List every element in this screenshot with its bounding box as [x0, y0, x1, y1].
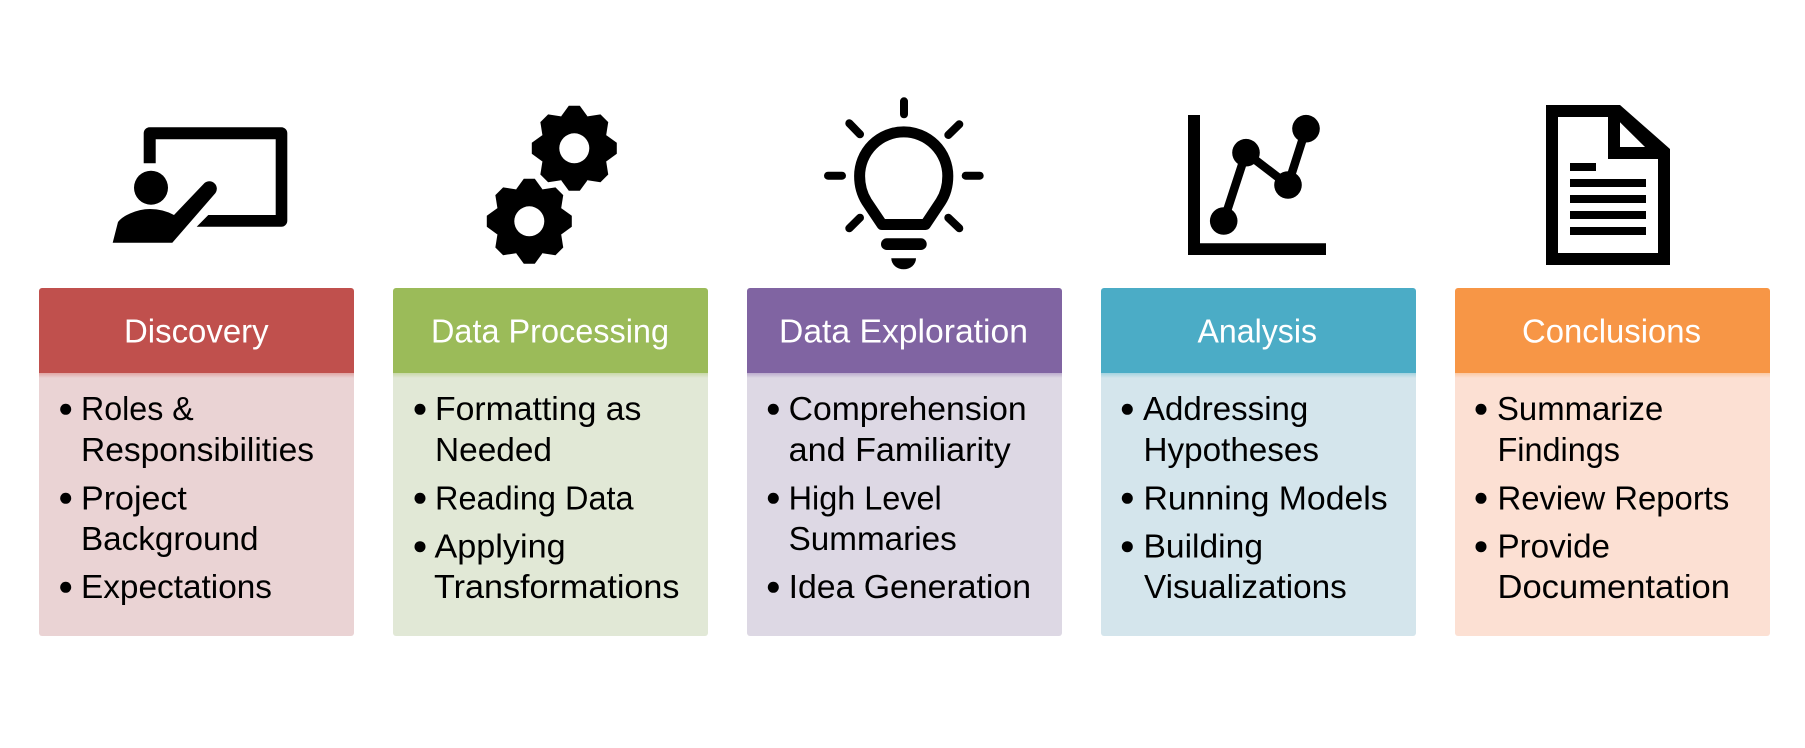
bullet list	[1476, 390, 1730, 605]
bullet list: and Familiarity	[789, 431, 1011, 468]
header divider fade	[393, 373, 708, 378]
heading: Analysis	[1198, 313, 1317, 350]
heading: Data Exploration	[779, 313, 1028, 350]
header divider fade	[747, 373, 1062, 378]
panel: Data Exploration	[747, 288, 1062, 636]
bullet list: Addressing	[1143, 390, 1308, 427]
bullet list: Project	[81, 479, 187, 516]
panel: Discovery	[39, 288, 354, 636]
bullet list: Findings	[1498, 431, 1620, 468]
panel body	[1101, 370, 1416, 636]
header box	[39, 288, 354, 373]
header box	[1455, 288, 1770, 373]
bullet list: Transformations	[434, 568, 680, 605]
header box	[747, 288, 1062, 373]
header divider fade	[1455, 373, 1770, 378]
bullet list: Documentation	[1498, 568, 1730, 605]
icon: line chart	[1188, 115, 1326, 255]
icon: gears	[487, 106, 617, 264]
panel: Conclusions	[1455, 288, 1770, 636]
lower gear	[487, 179, 572, 264]
bullet list: High Level	[789, 479, 942, 516]
header divider fade	[39, 373, 354, 378]
upper gear	[532, 106, 617, 191]
bullet list: Comprehension	[789, 390, 1027, 427]
bullet list	[60, 390, 314, 605]
bullet list	[768, 390, 1031, 605]
icon: presenter at board	[113, 127, 287, 243]
bullet list: Expectations	[81, 568, 272, 605]
bullet list: Roles &	[81, 390, 194, 427]
panel body	[747, 370, 1062, 636]
bullet list: Background	[81, 520, 258, 557]
panel: Data Processing	[393, 288, 708, 636]
panel: Analysis	[1101, 288, 1416, 636]
bullet list: Reading Data	[435, 479, 634, 516]
bullet list	[414, 390, 680, 605]
bullet list: Idea Generation	[789, 568, 1031, 605]
bullet list: Applying	[434, 528, 566, 565]
bullet list: Hypotheses	[1144, 431, 1319, 468]
icon: document	[1546, 105, 1670, 265]
panel body	[1455, 370, 1770, 636]
bullet list: Summarize	[1497, 390, 1663, 427]
heading: Data Processing	[431, 313, 669, 350]
bullet list: Summaries	[789, 520, 957, 557]
bullet list: Visualizations	[1144, 568, 1347, 605]
bullet list: Responsibilities	[81, 431, 314, 468]
heading: Conclusions	[1522, 313, 1701, 350]
bullet list: Needed	[435, 431, 552, 468]
bullet list: Formatting as	[435, 390, 641, 427]
bullet list: Running Models	[1144, 479, 1388, 516]
heading: Discovery	[124, 313, 269, 350]
header box	[1101, 288, 1416, 373]
header divider fade	[1101, 373, 1416, 378]
bullet list: Provide	[1498, 528, 1610, 565]
bullet list	[1122, 390, 1388, 605]
panel body	[39, 370, 354, 636]
header box	[393, 288, 708, 373]
bullet list: Review Reports	[1498, 479, 1729, 516]
icon: light bulb	[828, 101, 980, 269]
bullet list: Building	[1144, 528, 1263, 565]
panel body	[393, 370, 708, 636]
